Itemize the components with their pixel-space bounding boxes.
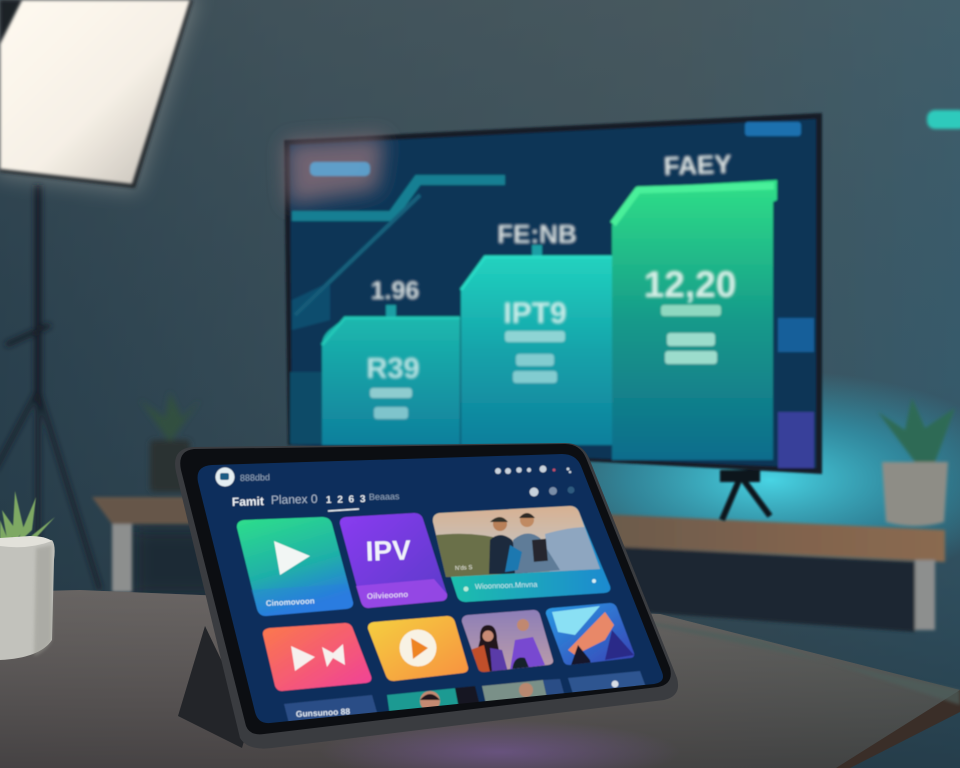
app header: Planex 0: [271, 492, 318, 507]
left potted plant: [0, 491, 55, 660]
bar: small: R39: [366, 353, 420, 385]
bar: tall: [612, 149, 777, 460]
card: yellow play: [368, 616, 468, 681]
card: featured photo: [430, 504, 610, 602]
bar: small: 1.96: [371, 277, 419, 305]
tablet device: [175, 443, 680, 749]
card: abstract art: [545, 602, 635, 666]
bar: tall: FAEY: [663, 149, 732, 181]
app header: Beaaas: [369, 491, 400, 502]
card: people photo: [461, 609, 554, 673]
TV screen with bar chart: [284, 113, 822, 520]
card: purple IPV: [340, 513, 447, 608]
bottom row thumbnails: [284, 670, 646, 721]
bar: medium: [461, 219, 612, 445]
foreground desk: [0, 590, 960, 768]
bottom row thumbnails: Gunsunoo 88: [296, 706, 351, 719]
softbox light on tripod: [0, 0, 198, 590]
card: green play: [237, 517, 353, 616]
mid-ground dim plant: [140, 392, 200, 492]
bar: medium: IPT9: [503, 297, 567, 330]
right potted plant: [878, 398, 955, 526]
app header: Famit: [232, 494, 264, 509]
bar: tall: 12,20: [644, 264, 736, 305]
app header: [216, 466, 574, 511]
back shelf: [92, 497, 945, 632]
card: green play: Cinomovoon: [266, 596, 315, 608]
card: red skip: [263, 623, 371, 691]
card: featured photo: Wioonnoon.Mnvna: [475, 580, 538, 591]
tablet stand: [178, 626, 250, 748]
bar: medium: FE:NB: [497, 219, 577, 249]
card: featured photo: N'ds S: [455, 565, 473, 572]
tablet screen: [198, 454, 663, 724]
app header: 888dbd: [240, 472, 270, 483]
card: purple IPV: Oilvieoono: [367, 590, 408, 601]
bar: small: [322, 277, 460, 445]
accent light top right: [927, 110, 960, 129]
app header: 1 2 6 3: [326, 494, 367, 506]
card: purple IPV: IPV: [365, 534, 412, 567]
